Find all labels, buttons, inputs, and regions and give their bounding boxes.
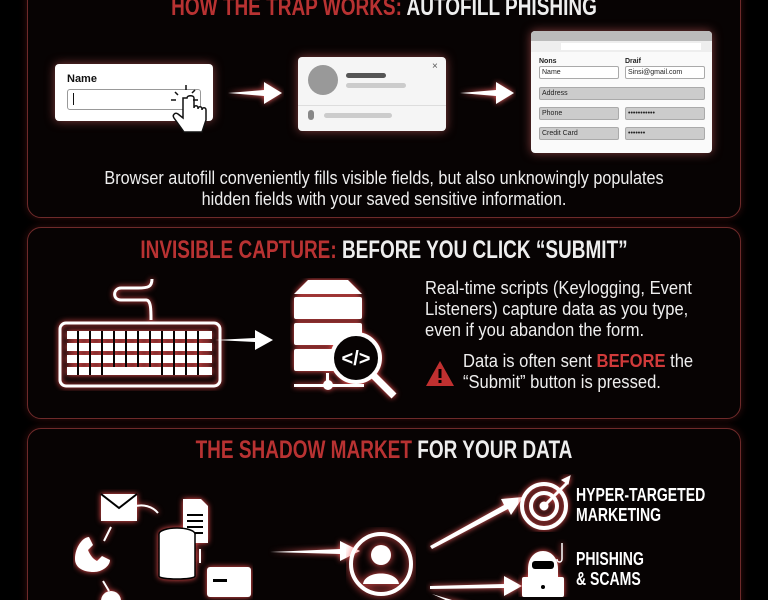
icon: user profile xyxy=(346,527,416,600)
label: hyper-targeted marketing: HYPER-TARGETED xyxy=(576,485,705,505)
arrow 1 xyxy=(228,79,284,107)
text: real-time scripts: even if you abandon the form. xyxy=(425,320,644,340)
label: phishing & scams: & SCAMS xyxy=(576,569,641,589)
browser form with hidden fields xyxy=(531,31,712,153)
text: real-time scripts: Listeners) capture data as you type, xyxy=(425,299,688,319)
browser form with hidden fields: Credit Card xyxy=(542,130,578,137)
text: real-time scripts xyxy=(425,278,692,340)
arrow xyxy=(270,538,362,564)
heading: shadow market: THE SHADOW MARKET FOR YOUR DATA xyxy=(196,436,572,464)
icon: server with code magnifier: </> xyxy=(342,348,370,370)
icon: target xyxy=(518,474,574,532)
browser form with hidden fields: Sinsi@gmail.com xyxy=(628,69,682,76)
browser form with hidden fields: Nons xyxy=(539,58,556,65)
text: autofill explanation: Browser autofill conveniently fills visible fields, but also unknowingly populates xyxy=(104,168,664,188)
text: autofill explanation: hidden fields with your saved sensitive information. xyxy=(202,189,566,209)
arrow 2 xyxy=(460,79,516,107)
callout: sent before submit: Data is often sent BEFORE the xyxy=(463,351,693,371)
label: hyper-targeted marketing: MARKETING xyxy=(576,505,661,525)
panel: how the trap works xyxy=(27,0,741,218)
panel: shadow market xyxy=(27,428,741,600)
autofill popup card: × xyxy=(432,61,438,72)
autofill popup card xyxy=(298,57,446,131)
label: hyper-targeted marketing xyxy=(576,485,705,525)
icon: keyboard xyxy=(54,276,226,391)
browser form with hidden fields: Address xyxy=(542,90,568,97)
browser form with hidden fields: Phone xyxy=(542,110,562,117)
arrows: to outcomes xyxy=(426,492,522,600)
panel: invisible capture xyxy=(27,227,741,419)
icon: hacker xyxy=(518,540,569,597)
callout: sent before submit xyxy=(463,351,693,392)
icon: hand pointer xyxy=(171,85,207,132)
text: autofill explanation xyxy=(104,168,664,209)
label: phishing & scams: PHISHING xyxy=(576,549,644,569)
icon: server with code magnifier xyxy=(290,278,400,402)
name field card: Name xyxy=(67,73,97,85)
browser form with hidden fields: Name xyxy=(542,69,561,76)
text: real-time scripts: Real-time scripts (Keylogging, Event xyxy=(425,278,692,298)
browser form with hidden fields: Draif xyxy=(625,58,641,65)
browser form with hidden fields: ••••••••••• xyxy=(628,110,655,117)
heading: before you click submit: INVISIBLE CAPTURE: BEFORE YOU CLICK “SUBMIT” xyxy=(140,236,628,264)
label: phishing & scams xyxy=(576,549,644,589)
icon: warning xyxy=(426,361,454,386)
browser form with hidden fields: ••••••• xyxy=(628,130,645,137)
name field card xyxy=(55,64,213,121)
callout: sent before submit: “Submit” button is pressed. xyxy=(463,372,661,392)
arrow xyxy=(216,330,273,350)
icon cluster: data sources xyxy=(73,489,253,600)
